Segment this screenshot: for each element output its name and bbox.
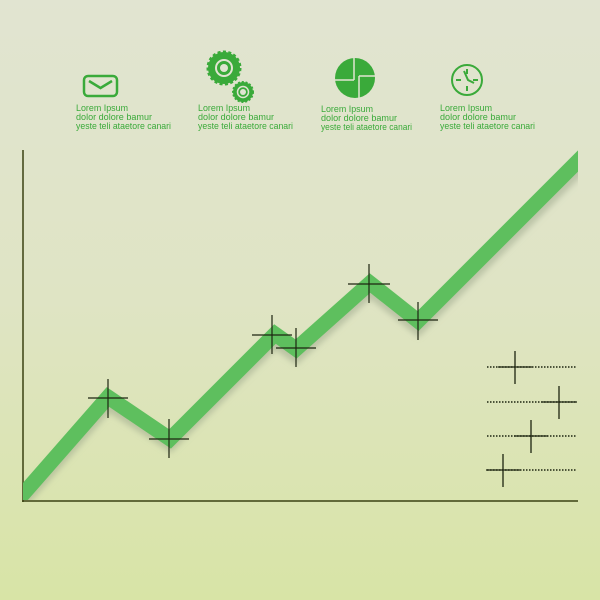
text block: column 3 <box>321 104 412 133</box>
data point markers <box>88 264 438 458</box>
line chart <box>10 147 592 515</box>
text block: column 2: yeste teli ataetore canari <box>198 121 293 132</box>
text block: column 1: Lorem Ipsum <box>76 103 128 114</box>
icon: clock <box>452 65 482 95</box>
text block: column 1 <box>76 103 171 132</box>
text block: column 3: dolor dolore bamur <box>321 113 397 124</box>
text block: column 2: Lorem Ipsum <box>198 103 250 114</box>
text block: column 4 <box>440 103 535 132</box>
text block: column 4: dolor dolore bamur <box>440 112 516 123</box>
text block: column 3: Lorem Ipsum <box>321 104 373 115</box>
text block: column 3: yeste teli ataetore canari <box>321 122 412 133</box>
legend crosses <box>486 351 577 487</box>
icon: pie chart <box>335 57 376 99</box>
text block: column 1: yeste teli ataetore canari <box>76 121 171 132</box>
icon: envelope <box>84 76 117 96</box>
text block: column 2 <box>198 103 293 132</box>
text block: column 1: dolor dolore bamur <box>76 112 152 123</box>
text block: column 2: dolor dolore bamur <box>198 112 274 123</box>
icon: gears <box>208 52 253 102</box>
chart axes <box>22 150 578 502</box>
text block: column 4: Lorem Ipsum <box>440 103 492 114</box>
text block: column 4: yeste teli ataetore canari <box>440 121 535 132</box>
